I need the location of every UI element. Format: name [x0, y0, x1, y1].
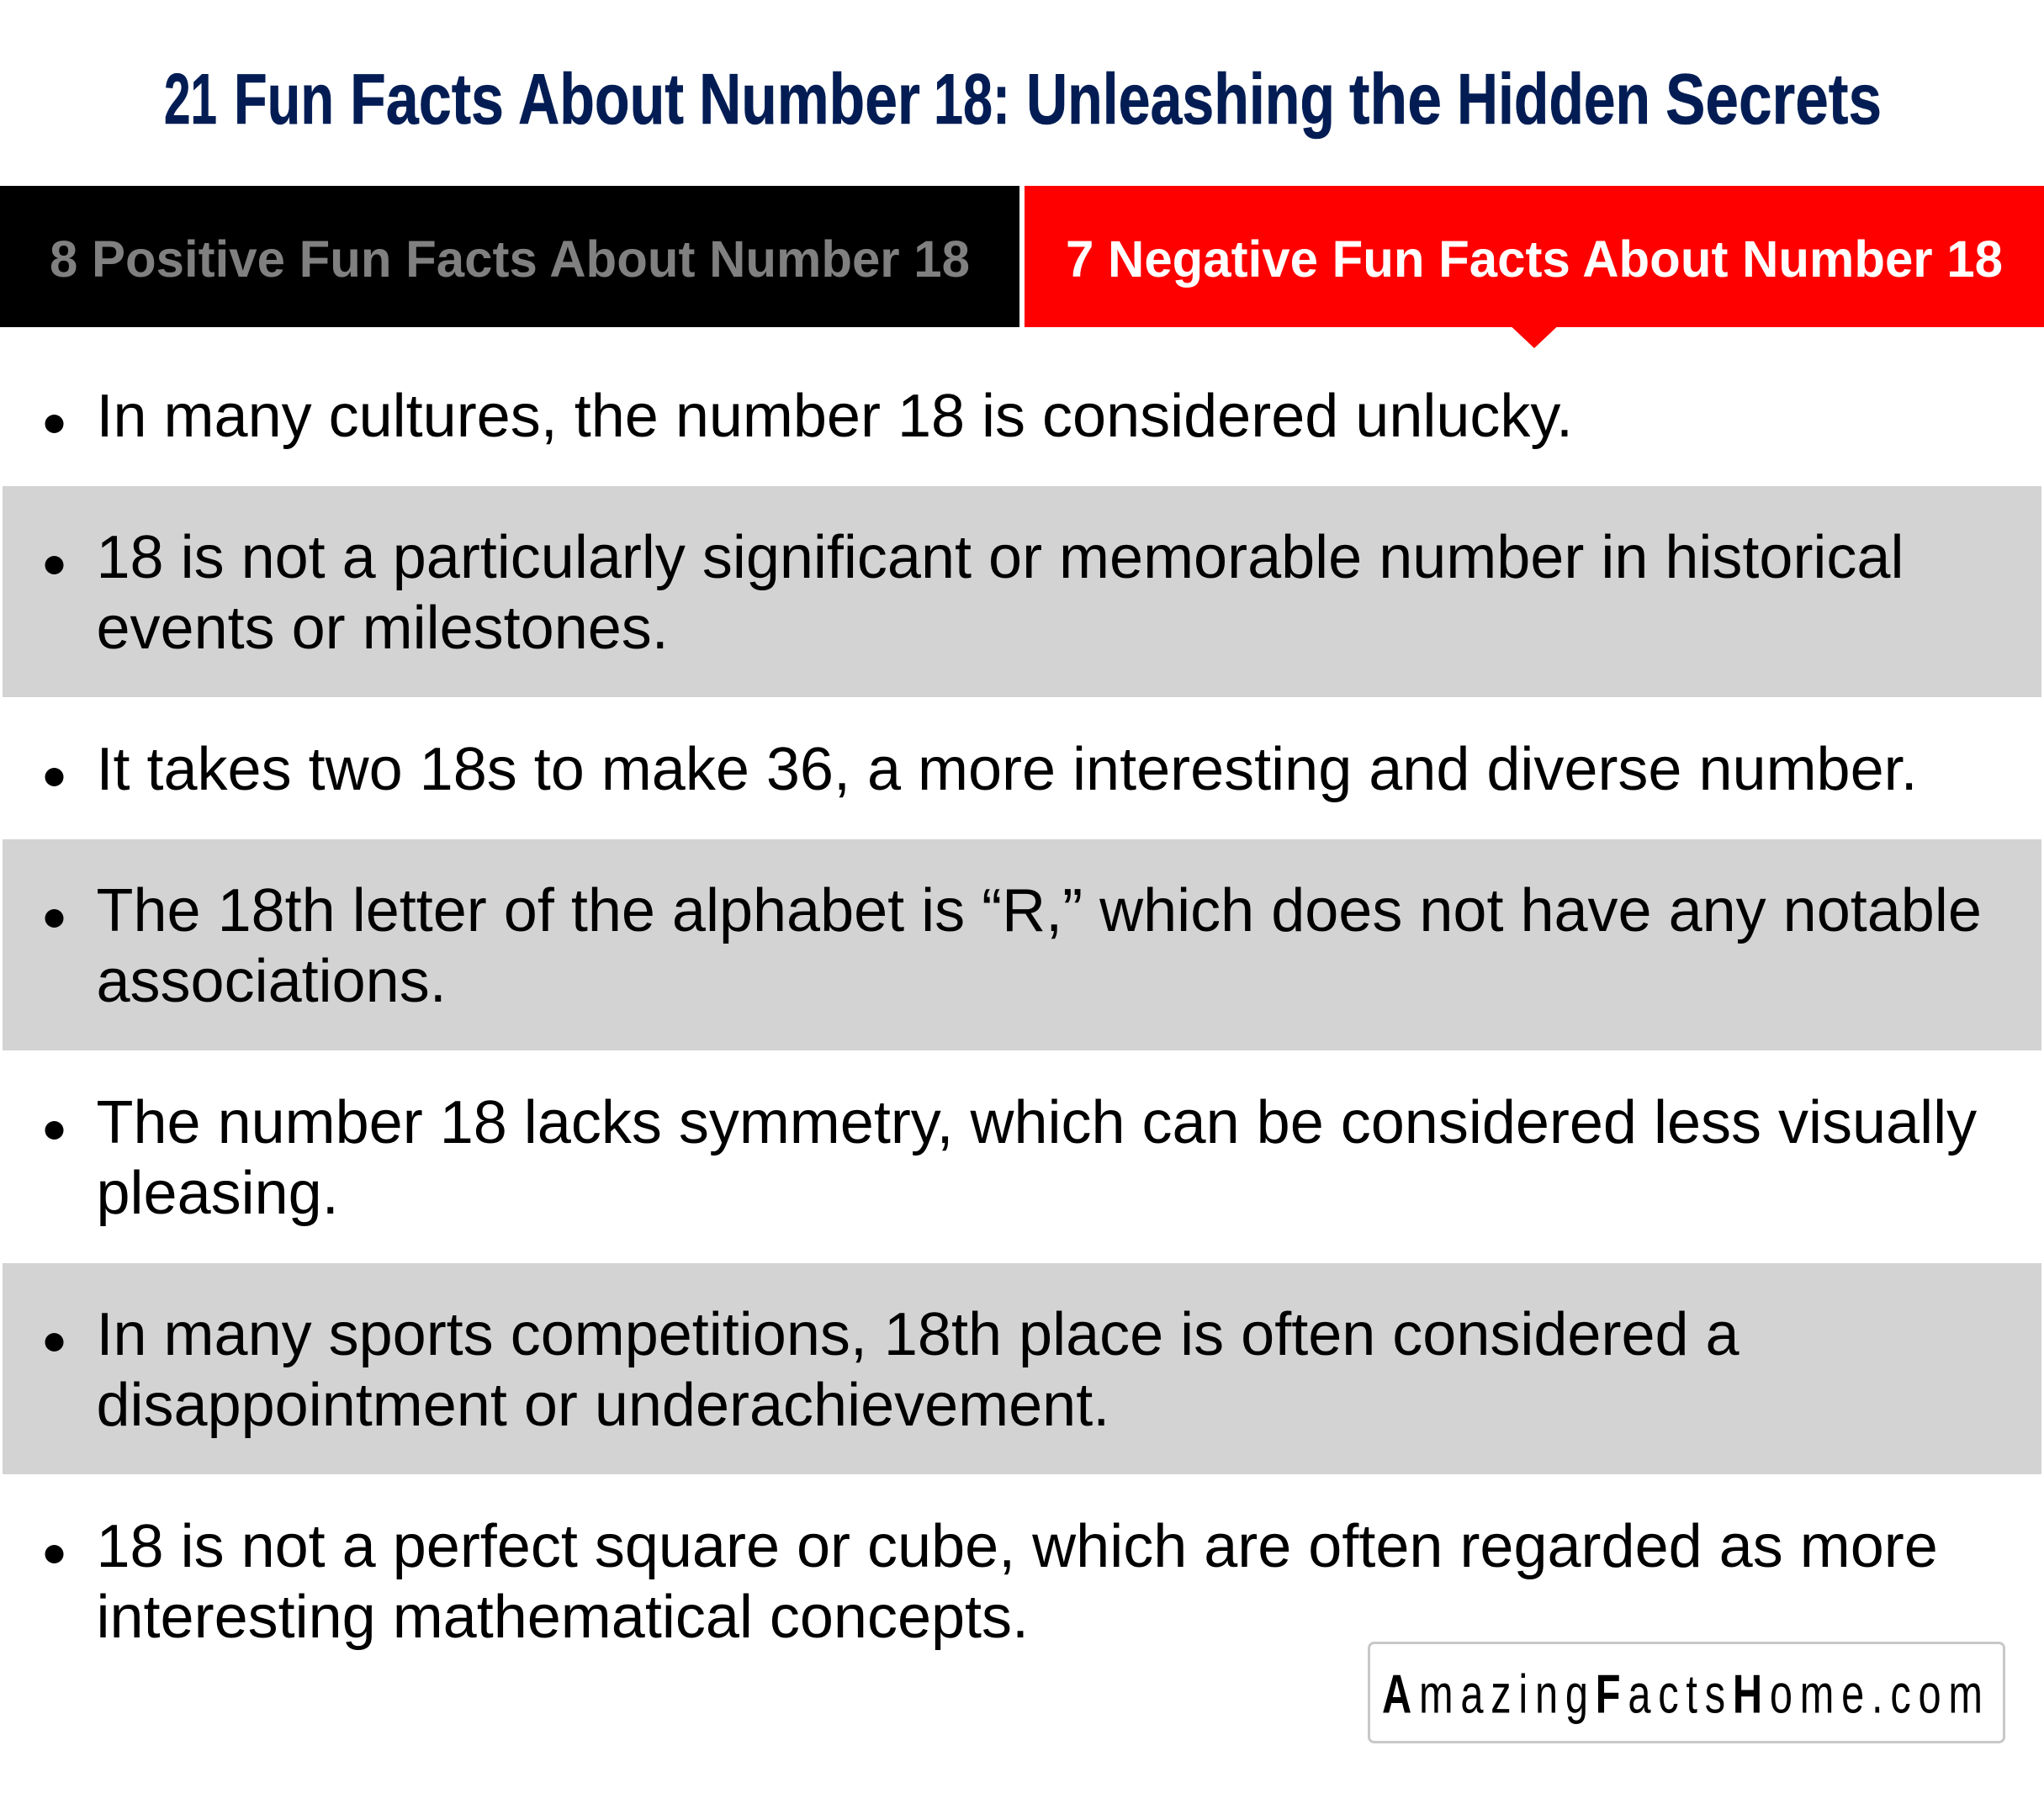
watermark: AmazingFactsHome.com: AmazingFactsHome.com [1382, 1664, 1983, 1725]
fact 2: 18 is not a particularly significant or memorable number in historical [96, 524, 1904, 591]
title: About [518, 60, 684, 140]
fact 5 [45, 1089, 1977, 1227]
fact 7 [45, 1513, 1938, 1651]
fact 5: pleasing. [96, 1160, 339, 1227]
fact 4: The 18th letter of the alphabet is “R,” which does not have any notable [96, 877, 1982, 944]
fact 5: The number 18 lacks symmetry, which can be considered less visually [96, 1089, 1977, 1156]
tab: positive facts: 8 Positive Fun Facts About Number 18 [50, 230, 970, 288]
tab: positive facts [0, 186, 1019, 327]
fact 7: interesting mathematical concepts. [96, 1584, 1029, 1651]
watermark: AmazingFactsHome.com [1369, 1643, 2004, 1743]
title: the [1349, 60, 1442, 140]
fact 6 [3, 1263, 2041, 1474]
tab: negative facts (active): 7 Negative Fun Facts About Number 18 [1066, 230, 2003, 288]
fact 1: In many cultures, the number 18 is considered unlucky. [96, 383, 1573, 450]
fact 2: events or milestones. [96, 595, 669, 662]
title [164, 60, 1882, 140]
fact 4 [3, 839, 2041, 1050]
title: Fun [234, 60, 334, 140]
title: Unleashing [1026, 60, 1335, 140]
title: Number [699, 60, 920, 140]
title: 18: [934, 60, 1010, 140]
fact 7: 18 is not a perfect square or cube, which are often regarded as more [96, 1513, 1938, 1580]
title: 21 [164, 60, 217, 140]
fact 3: It takes two 18s to make 36, a more interesting and diverse number. [96, 736, 1918, 803]
fact 2 [3, 486, 2041, 697]
title: Secrets [1665, 60, 1882, 140]
title: Facts [350, 60, 504, 140]
tab: negative facts (active) [1025, 186, 2044, 348]
fact 6: disappointment or underachievement. [96, 1372, 1109, 1439]
fact 4: associations. [96, 948, 447, 1015]
title: Hidden [1457, 60, 1650, 140]
fact 6: In many sports competitions, 18th place is often considered a [96, 1301, 1740, 1368]
